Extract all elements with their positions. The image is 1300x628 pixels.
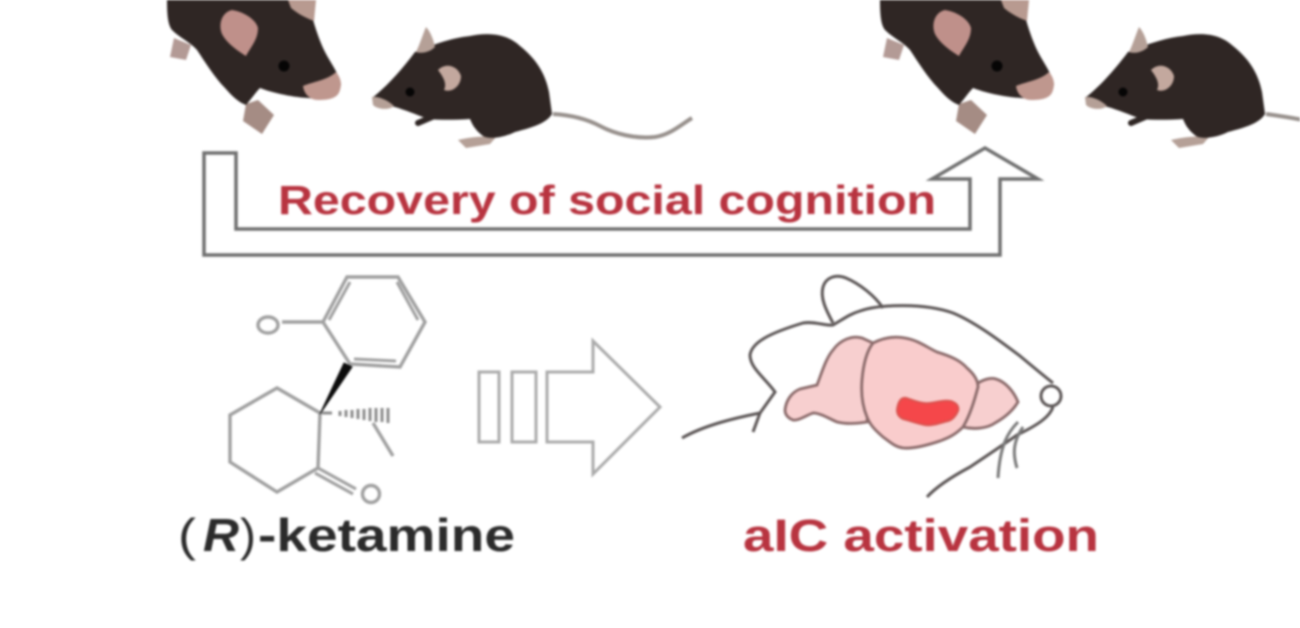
label: (R)-ketamine: R — [203, 509, 239, 561]
brain: cortex — [862, 337, 978, 448]
label: (R)-ketamine: ( — [178, 509, 197, 561]
aIC highlight — [897, 398, 958, 425]
icon: mouse outline with brain — [682, 276, 1061, 497]
whiskers — [998, 422, 1023, 478]
label: (R)-ketamine: ) — [240, 509, 256, 561]
brain: olfactory bulb — [963, 378, 1018, 428]
ear outline — [822, 276, 883, 323]
label: (R)-ketamine — [178, 509, 515, 561]
nose — [1041, 386, 1061, 406]
tail stub — [753, 413, 760, 432]
heading: recovery of social cognition: Recovery of social cognition — [278, 177, 936, 223]
label: aIC activation: aIC activation — [743, 510, 1099, 561]
icon: (R)-ketamine structure — [230, 277, 425, 502]
arrow: recovery U-shaped arrow — [204, 148, 1038, 255]
icon: left small mouse — [372, 27, 692, 148]
icon: left large mouse — [167, 0, 341, 134]
icon: right large mouse — [880, 0, 1054, 134]
label: (R)-ketamine: -ketamine — [258, 509, 515, 561]
hashed bond — [322, 408, 388, 423]
brain: hindbrain — [785, 337, 873, 424]
icon: right small mouse — [1085, 27, 1300, 148]
arrow: block arrow to activation — [479, 341, 660, 474]
mouse body outline — [682, 306, 1053, 497]
